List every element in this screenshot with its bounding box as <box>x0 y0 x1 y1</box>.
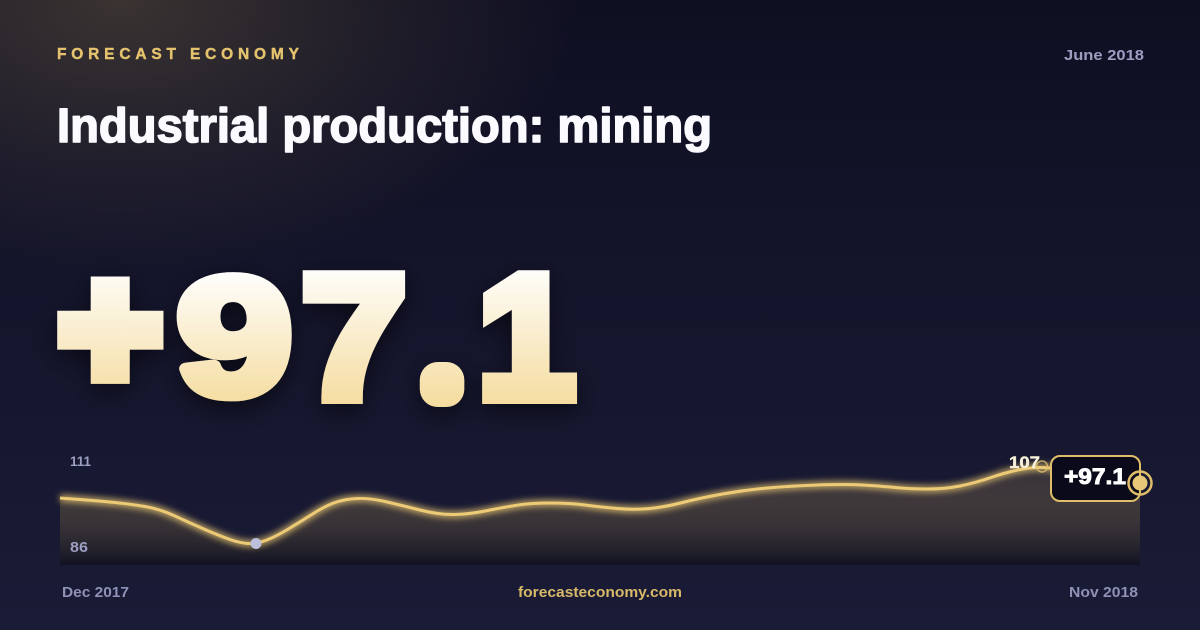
source url: forecasteconomy.com <box>518 585 682 601</box>
end date: Nov 2018 <box>1069 585 1138 601</box>
axis min label: 86 <box>70 540 88 556</box>
high point label: 107 <box>1009 453 1040 472</box>
headline value: 1 <box>478 239 575 434</box>
headline value: 9 <box>177 244 292 429</box>
title: Industrial production: mining <box>57 100 712 153</box>
headline value: + <box>60 232 160 424</box>
line <box>60 468 1140 544</box>
headline value: . <box>434 335 450 402</box>
current value callout: +97.1 <box>1064 464 1126 489</box>
sparkline chart <box>60 453 1152 565</box>
start date: Dec 2017 <box>62 585 129 601</box>
high point marker <box>1036 461 1048 472</box>
brand label: FORECAST ECONOMY <box>57 46 300 63</box>
current value callout <box>1051 456 1140 501</box>
axis max label: 111 <box>70 454 91 469</box>
date: June 2018 <box>1064 47 1144 64</box>
headline value: 7 <box>302 240 406 435</box>
low point marker <box>250 538 262 549</box>
line glow <box>60 468 1140 544</box>
area under line <box>60 468 1140 565</box>
end point marker <box>1128 472 1152 494</box>
headline value <box>60 232 575 435</box>
